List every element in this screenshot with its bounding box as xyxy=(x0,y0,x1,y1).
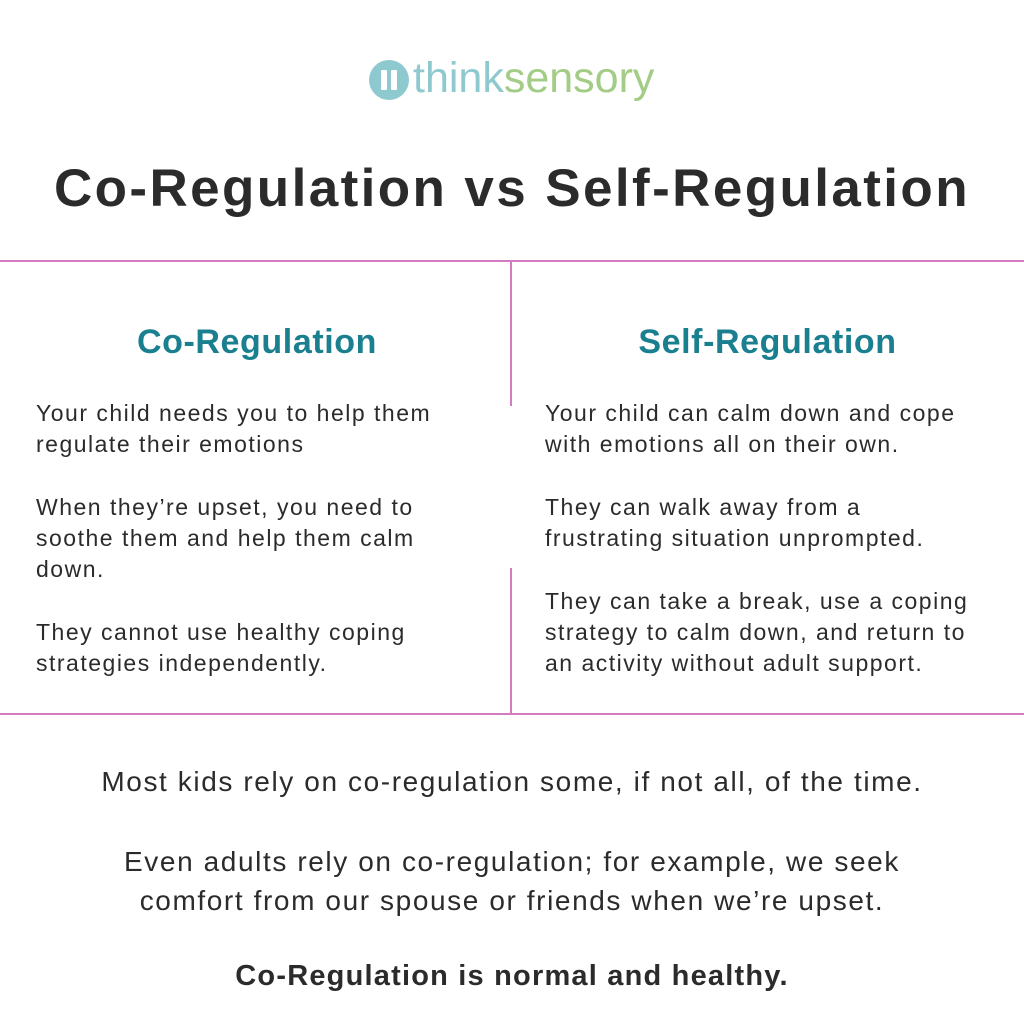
text block: with emotions all on their own. xyxy=(545,431,900,457)
text block: Your child can calm down and cope xyxy=(545,400,956,426)
panel: co-regulation xyxy=(36,323,431,676)
text block: Your child needs you to help them xyxy=(36,400,431,426)
heading: self-regulation: Self-Regulation xyxy=(638,323,897,361)
logo text: thinksensory xyxy=(413,54,654,102)
text block: They can take a break, use a coping xyxy=(545,588,968,614)
text block: frustrating situation unprompted. xyxy=(545,525,924,551)
icon: logo circle xyxy=(369,60,409,100)
text block: down. xyxy=(36,556,105,582)
text block: strategies independently. xyxy=(36,650,328,676)
text: conclusion: Co-Regulation is normal and healthy. xyxy=(235,960,789,992)
text block: They cannot use healthy coping xyxy=(36,619,406,645)
text block: strategy to calm down, and return to xyxy=(545,619,966,645)
heading: co-regulation: Co-Regulation xyxy=(137,323,377,361)
dividers xyxy=(0,260,1024,262)
text block: They can walk away from a xyxy=(545,494,861,520)
text: most kids: Most kids rely on co-regulation some, if not all, of the time. xyxy=(101,766,923,797)
text block: regulate their emotions xyxy=(36,431,304,457)
text: even adults xyxy=(124,846,900,916)
logo xyxy=(369,54,654,102)
title: Co-Regulation vs Self-Regulation xyxy=(54,159,970,218)
text block xyxy=(36,400,431,676)
text block: soothe them and help them calm xyxy=(36,525,415,551)
panel: self-regulation xyxy=(545,323,968,676)
text: even adults: comfort from our spouse or friends when we’re upset. xyxy=(140,885,884,916)
text block xyxy=(545,400,968,676)
text block: When they’re upset, you need to xyxy=(36,494,414,520)
bottom text xyxy=(101,766,923,992)
text block: an activity without adult support. xyxy=(545,650,923,676)
text: even adults: Even adults rely on co-regulation; for example, we seek xyxy=(124,846,900,877)
